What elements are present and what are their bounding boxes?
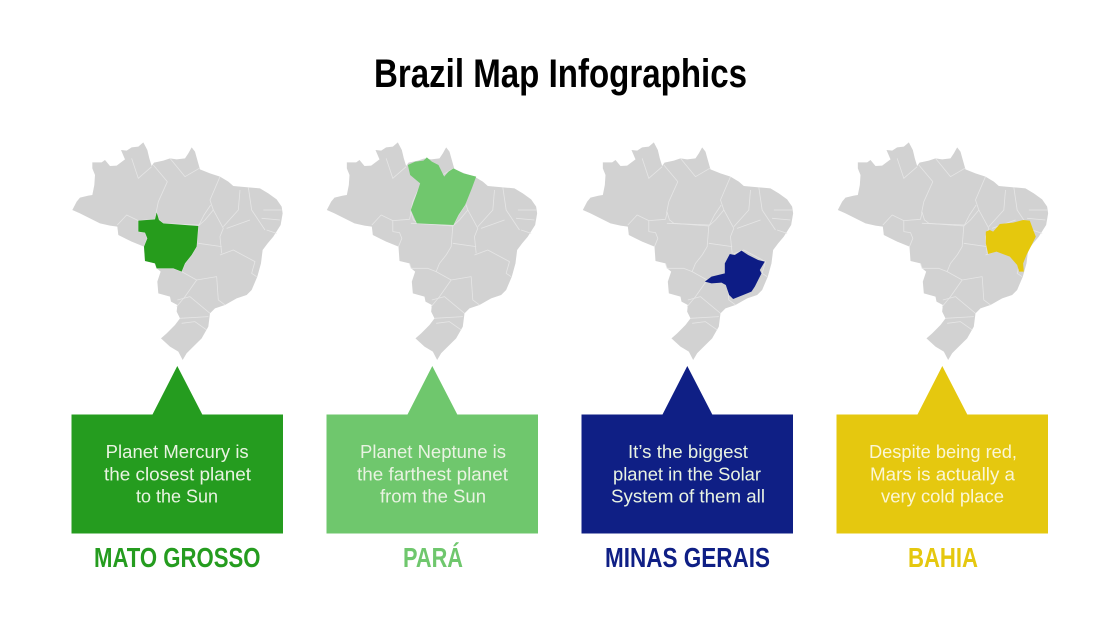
map: Minas Gerais highlighted xyxy=(583,142,793,360)
state name: BAHIA xyxy=(908,542,978,573)
callout box xyxy=(72,366,283,534)
map: Mato Grosso highlighted xyxy=(72,142,283,360)
panel: Minas Gerais xyxy=(582,142,793,573)
callout text xyxy=(869,442,1017,507)
callout text: Mars is actually a xyxy=(870,465,1016,485)
callout text: planet in the Solar xyxy=(613,465,761,485)
callout text: the closest planet xyxy=(104,465,251,485)
callout text: from the Sun xyxy=(380,487,486,507)
callout text: the farthest planet xyxy=(357,465,508,485)
callout text xyxy=(357,442,508,507)
panel: Mato Grosso xyxy=(72,142,283,573)
callout text: Planet Neptune is xyxy=(360,442,506,462)
callout text xyxy=(611,442,765,507)
map: Bahia highlighted xyxy=(838,142,1048,360)
title: Brazil Map Infographics xyxy=(374,52,747,96)
callout text: very cold place xyxy=(881,487,1004,507)
callout text: Despite being red, xyxy=(869,442,1017,462)
callout box xyxy=(836,366,1048,534)
state name: MATO GROSSO xyxy=(94,542,260,573)
panel: Bahia xyxy=(836,142,1048,573)
callout box xyxy=(582,366,793,534)
panel: Pará xyxy=(326,142,538,573)
callout text: System of them all xyxy=(611,487,765,507)
callout box xyxy=(326,366,538,534)
callout text: It’s the biggest xyxy=(628,442,748,462)
callout text: to the Sun xyxy=(136,487,218,507)
map: Pará highlighted xyxy=(327,142,537,360)
callout text xyxy=(104,442,251,507)
callout text: Planet Mercury is xyxy=(106,442,249,462)
state name: PARÁ xyxy=(403,542,463,573)
state name: MINAS GERAIS xyxy=(605,542,770,573)
